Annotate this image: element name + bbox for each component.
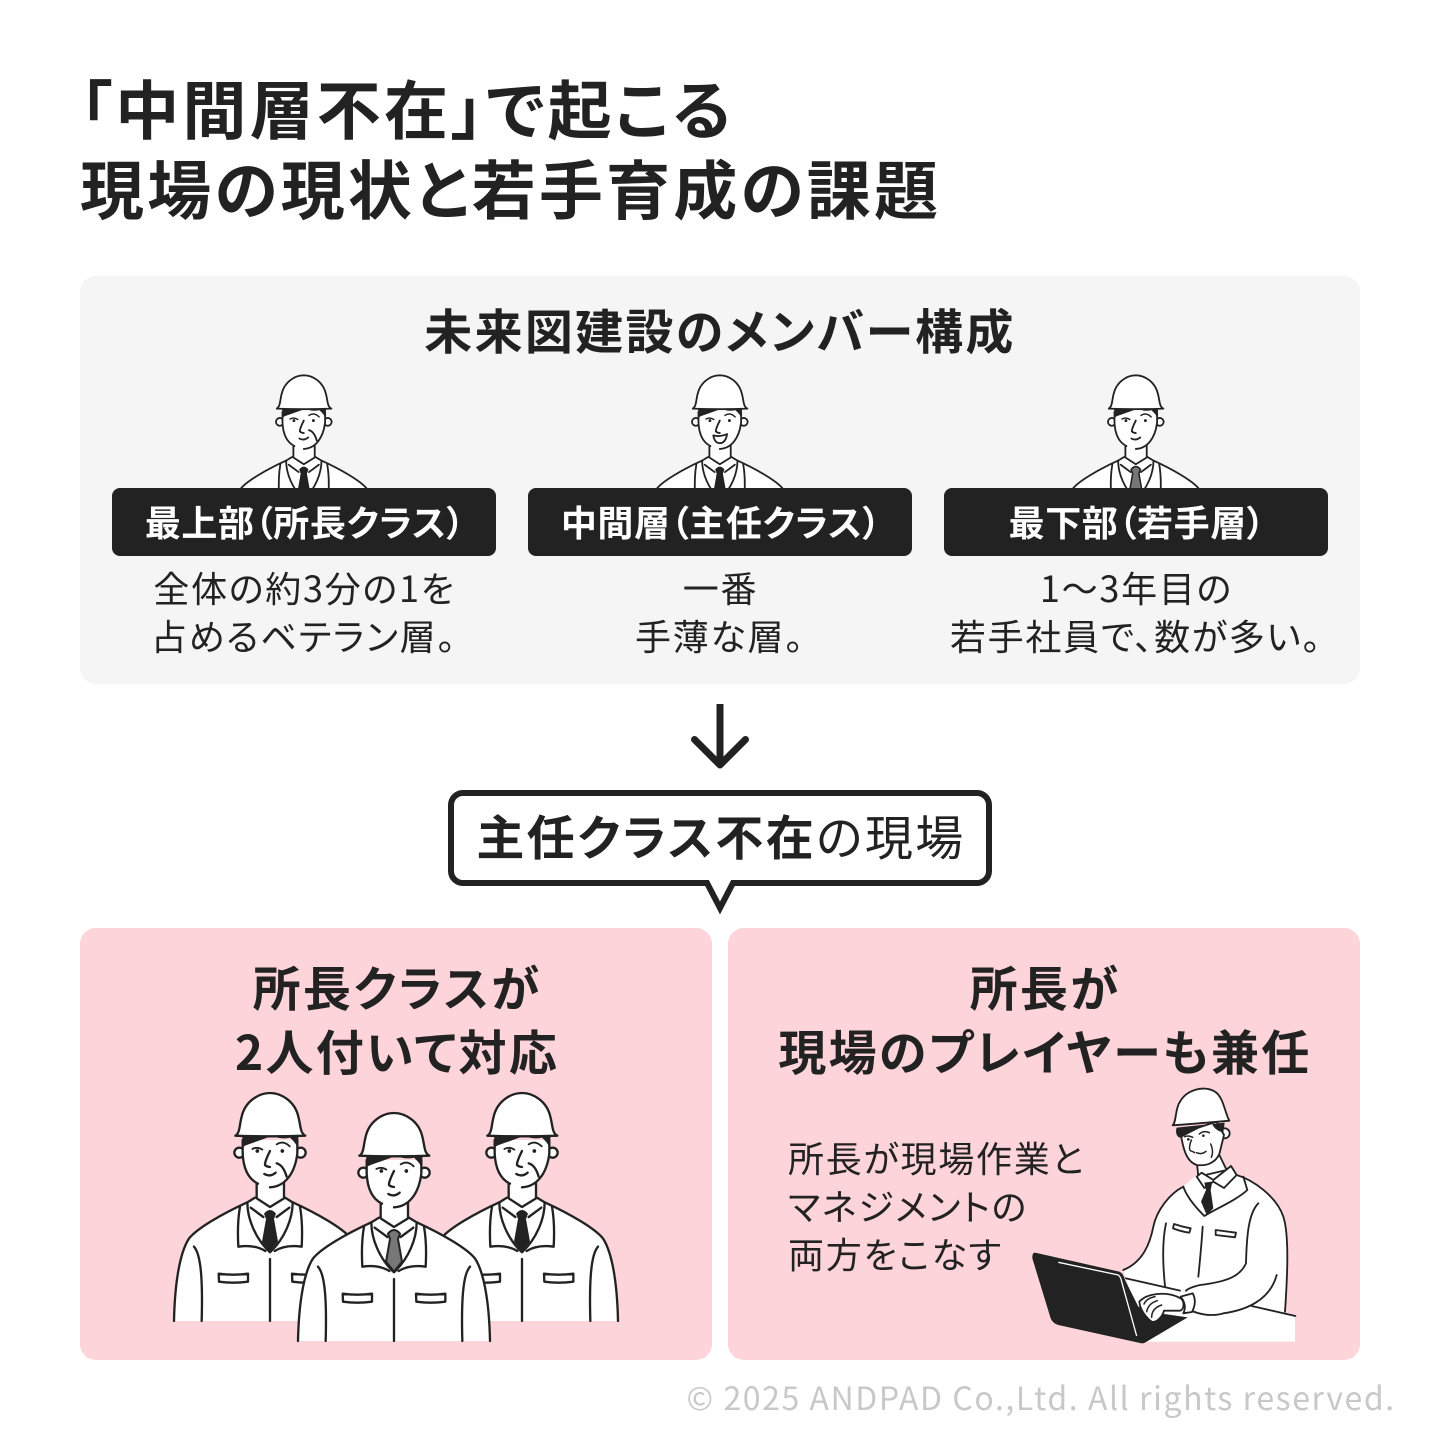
text: middle layer description: 一番 [683,561,758,613]
icon: young worker [1072,374,1200,488]
panel: director as player [728,928,1360,1360]
text: top layer description: 占めるベテラン層。 [151,609,457,661]
text: top layer description: 全体の約3分の1を [153,561,456,613]
arrow: down [691,704,749,768]
badge: bottom layer: 最下部（若手層） [1009,495,1265,547]
panel heading: two directors: 2人付いて対応 [235,1014,559,1084]
text: bottom layer description: 若手社員で、数が多い。 [950,609,1322,661]
panel heading: two directors: 所長クラスが [253,950,541,1020]
badge: middle layer [528,488,912,556]
text: bottom layer description: 1～3年目の [1040,561,1233,613]
panel heading: director as player [778,950,1312,1084]
panel heading: director as player: 所長が [970,950,1120,1020]
text: bottom layer description [950,561,1322,661]
title [80,61,941,233]
icon: veteran worker [240,374,368,488]
text: top layer description [151,561,457,661]
illustration: director with laptop [1032,1088,1296,1344]
callout bubble [448,790,992,914]
badge: bottom layer [944,488,1328,556]
badge: top layer [112,488,496,556]
text: middle layer description: 手薄な層。 [635,609,805,661]
copyright: © 2025 ANDPAD Co.,Ltd. All rights reserved. [686,1374,1396,1420]
text: director description: 所長が現場作業と [788,1131,1085,1183]
text: director description: マネジメントの [788,1179,1028,1231]
title: 現場の現状と若手育成の課題 [80,141,941,233]
panel heading: two directors [235,950,559,1084]
callout text: 主任クラス不在の現場 [476,799,966,869]
panel heading: 未来図建設のメンバー構成 [424,293,1016,363]
illustration: three workers [172,1092,620,1342]
icon: mid-level worker [656,374,784,488]
text: director description: 両方をこなす [788,1227,1003,1279]
panel: member composition [80,276,1360,684]
badge: top layer: 最上部（所長クラス） [145,495,465,547]
title: 「中間層不在」で起こる [80,61,734,153]
badge: middle layer: 中間層（主任クラス） [561,495,881,547]
panel: two directors [80,928,712,1360]
panel heading: director as player: 現場のプレイヤーも兼任 [778,1014,1312,1084]
text: middle layer description [635,561,805,661]
text: director description [788,1131,1085,1279]
